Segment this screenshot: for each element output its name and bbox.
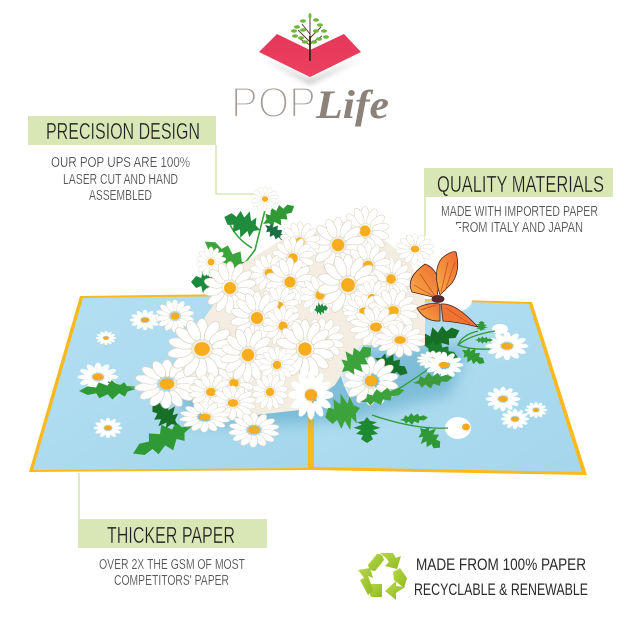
- logo wordmark: [231, 79, 389, 127]
- description: OUR POP UPS ARE 100%: [51, 155, 190, 171]
- blue panel right: [314, 297, 582, 472]
- heading bar: [78, 519, 267, 548]
- callout: precision design: [28, 116, 254, 204]
- logo red open book: [259, 34, 361, 77]
- description: ASSEMBLED: [89, 188, 152, 204]
- pop-up card: [29, 187, 587, 475]
- pop-up daisies front layer: [179, 351, 463, 447]
- upper wings: [410, 264, 439, 298]
- logo wordmark: POP: [231, 79, 316, 127]
- heading: PRECISION DESIGN: [46, 118, 200, 144]
- description: OVER 2X THE GSM OF MOST: [99, 557, 245, 573]
- lower wings: [417, 304, 440, 321]
- front pop-up leaves: [313, 301, 454, 436]
- logo tree: [291, 13, 329, 61]
- icon: recycle symbol: [358, 553, 407, 600]
- heading: THICKER PAPER: [107, 522, 235, 548]
- cast shadows: [170, 345, 470, 425]
- butterfly: [410, 252, 478, 327]
- description: [99, 557, 245, 589]
- blue panel left: [33, 295, 308, 470]
- logo shadow: [262, 58, 362, 84]
- connector line: [78, 473, 80, 519]
- description: [441, 204, 598, 236]
- card base right: [312, 296, 587, 475]
- recycling note: [358, 553, 588, 600]
- description: LASER CUT AND HAND: [63, 172, 178, 188]
- flower cluster base: [170, 225, 425, 420]
- description: [51, 155, 190, 204]
- connector line: [424, 197, 426, 236]
- recycling text: [414, 555, 588, 599]
- description: COMPETITORS' PAPER: [114, 573, 229, 589]
- logo: [231, 13, 389, 127]
- connector line: [216, 145, 254, 194]
- back leaves and stems: [191, 197, 464, 383]
- blue folded petals: [339, 337, 375, 397]
- pop-up daisies back layer: [155, 187, 435, 363]
- painted flat daisies right: [445, 324, 547, 439]
- heading bar: [28, 116, 216, 145]
- body: [432, 296, 444, 302]
- card base left: [29, 293, 313, 472]
- callout: thicker paper: [78, 473, 267, 589]
- logo wordmark: Life: [315, 82, 389, 127]
- white petals behind butterfly: [438, 288, 472, 312]
- callout: quality materials: [424, 168, 613, 236]
- painted flat daisies left: [78, 310, 160, 438]
- wing veins: [414, 262, 470, 324]
- painted stems and leaves: [79, 320, 495, 466]
- heading bar: [424, 168, 613, 197]
- pop-up daisies middle layer: [134, 286, 426, 410]
- description: FROM ITALY AND JAPAN: [455, 220, 583, 236]
